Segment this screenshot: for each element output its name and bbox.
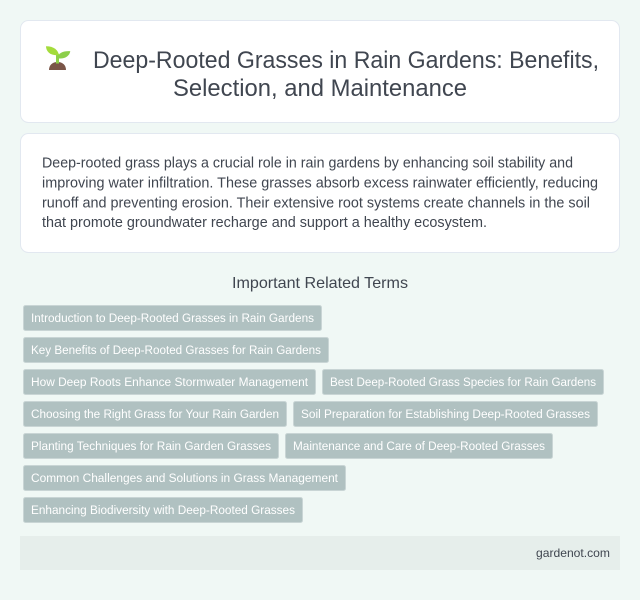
related terms tags: Planting Techniques for Rain Garden Grasses [31,439,271,453]
related terms tags: Choosing the Right Grass for Your Rain Garden [31,407,279,421]
title text: Selection, and Maintenance [173,75,467,102]
intro paragraph: runoff and preventing erosion. Their extensive root systems create channels in the soil [42,196,590,212]
related terms tags: Introduction to Deep-Rooted Grasses in Rain Gardens [31,311,314,325]
intro paragraph: that promote groundwater recharge and support a healthy ecosystem. [42,215,487,231]
related terms tags: Soil Preparation for Establishing Deep-Rooted Grasses [301,407,590,421]
icon: seedling [46,46,70,70]
related terms tags: Enhancing Biodiversity with Deep-Rooted Grasses [31,503,295,517]
title text: Deep-Rooted Grasses in Rain Gardens: Benefits, [93,47,599,74]
intro paragraph: improving water infiltration. These grasses absorb excess rainwater efficiently, reducing [42,176,598,192]
related terms tags [24,306,604,522]
related terms tags: Common Challenges and Solutions in Grass Management [31,471,339,485]
footer source text: gardenot.com [536,546,610,560]
related terms tags: How Deep Roots Enhance Stormwater Management [31,375,309,389]
related terms tags: Best Deep-Rooted Grass Species for Rain Gardens [330,375,596,389]
heading: related terms: Important Related Terms [232,275,408,292]
related terms tags: Key Benefits of Deep-Rooted Grasses for Rain Gardens [31,343,321,357]
intro paragraph [42,156,598,231]
intro paragraph: Deep-rooted grass plays a crucial role in rain gardens by enhancing soil stability and [42,156,573,172]
intro panel [20,134,620,252]
footer [20,536,620,570]
title text [93,47,599,102]
title panel [20,20,620,122]
related terms tags: Maintenance and Care of Deep-Rooted Grasses [293,439,545,453]
